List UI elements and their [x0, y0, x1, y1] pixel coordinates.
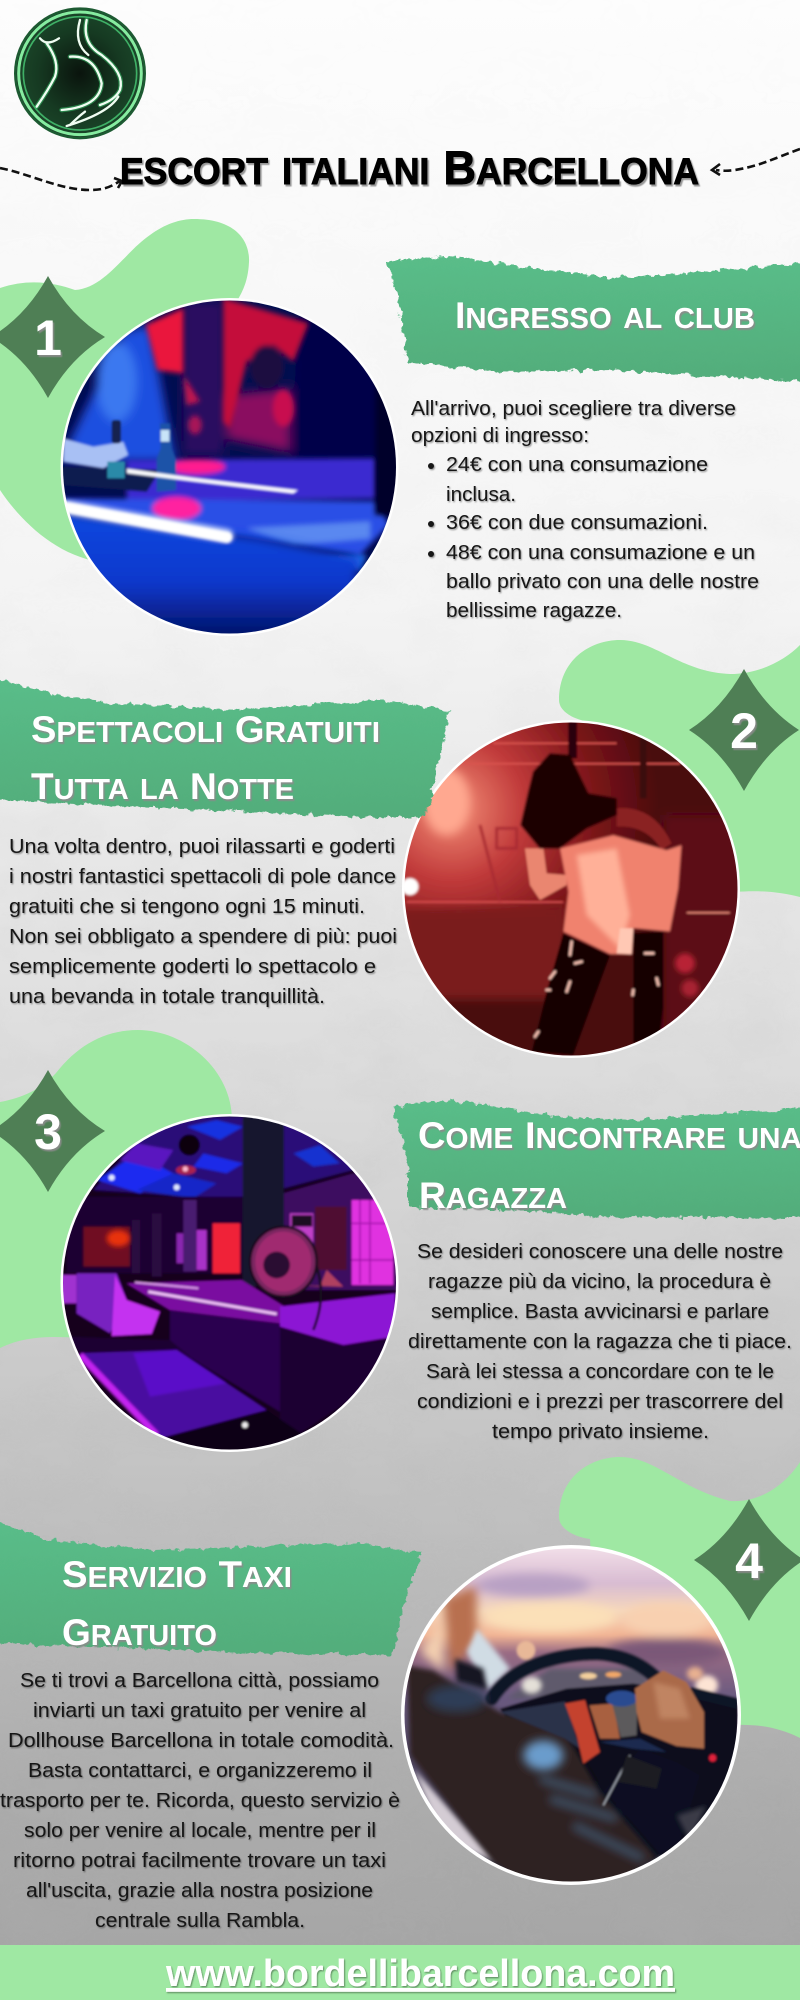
text block 1: 24€ con una consumazione	[446, 454, 708, 476]
heading 2	[31, 705, 380, 808]
star badge 2: 2	[730, 703, 758, 759]
text block 3: Se desideri conoscere una delle nostre	[417, 1241, 783, 1263]
blob 2	[559, 640, 800, 900]
text block 2: Non sei obbligato a spendere di più: puoi	[9, 926, 397, 948]
text block 3: tempo privato insieme.	[492, 1421, 709, 1443]
text block 1: inclusa.	[446, 484, 516, 506]
star badge 2	[689, 669, 799, 791]
photo 3: club interior in purple light	[60, 1110, 400, 1455]
text block 4: solo per venire al locale, mentre per il	[24, 1820, 376, 1842]
heading 3: Ragazza	[419, 1171, 567, 1217]
dashed arrow right	[712, 149, 800, 175]
blob 4	[559, 1457, 800, 1738]
text block 3: direttamente con la ragazza che ti piace.	[408, 1331, 792, 1353]
text block 1: 36€ con due consumazioni.	[446, 512, 708, 534]
text block 2: gratuiti che si tengono ogni 15 minuti.	[9, 896, 365, 918]
text block 1: ballo privato con una delle nostre	[446, 571, 759, 593]
text block 4: trasporto per te. Ricorda, questo servizio è	[0, 1790, 400, 1812]
banner 2	[0, 678, 449, 817]
text block 1: bellissime ragazze.	[446, 600, 622, 622]
text block 2: i nostri fantastici spettacoli di pole dance	[9, 866, 396, 888]
heading 3: Come Incontrare una	[418, 1111, 800, 1157]
text block 3: Sarà lei stessa a concordare con te le	[426, 1361, 774, 1383]
section 3	[0, 1070, 800, 1455]
text block 2: semplicemente goderti lo spettacolo e	[9, 956, 376, 978]
star badge 4: 4	[735, 1533, 763, 1589]
photo 2: pole dancer in red light	[400, 715, 745, 1060]
banner 1: Ingresso al club	[455, 291, 755, 337]
heading 2: Spettacoli Gratuiti	[31, 705, 380, 751]
logo	[15, 9, 145, 138]
text block 2	[9, 836, 397, 1008]
dashed arrow left	[0, 168, 122, 190]
heading 4: Gratuito	[62, 1608, 217, 1654]
banner 3	[393, 1100, 800, 1218]
text block 3: semplice. Basta avvicinarsi e parlare	[431, 1301, 769, 1323]
section 2	[0, 669, 799, 1060]
section 1	[0, 256, 800, 640]
text block 1: All'arrivo, puoi scegliere tra diverse	[411, 398, 736, 420]
photo 4: hand on steering wheel	[400, 1542, 745, 1887]
heading 4	[62, 1550, 292, 1654]
photo 1: club table in blue light	[60, 295, 400, 640]
text block 3: ragazze più da vicino, la procedura è	[428, 1271, 771, 1293]
star badge 3	[0, 1070, 105, 1192]
blob 1	[0, 219, 249, 562]
footer band	[0, 1945, 800, 2000]
text block 3: condizioni e i prezzi per trascorrere del	[417, 1391, 783, 1413]
text block 3	[408, 1241, 792, 1443]
banner 4	[0, 1521, 421, 1655]
star badge 1	[0, 276, 105, 398]
text block 4: ritorno potrai facilmente trovare un taxi	[13, 1850, 386, 1872]
text block 1: 48€ con una consumazione e un	[446, 542, 755, 564]
text block 4: Dollhouse Barcellona in totale comodità.	[8, 1730, 394, 1752]
star badge 1: 1	[34, 310, 62, 366]
text block 2: Una volta dentro, puoi rilassarti e goderti	[9, 836, 395, 858]
heading 4: Servizio Taxi	[62, 1550, 292, 1596]
star badge 4	[694, 1499, 800, 1621]
banner 1	[387, 256, 800, 381]
blob 3	[0, 1030, 232, 1348]
text block 4: Basta contattarci, e organizzeremo il	[28, 1760, 372, 1782]
text block 4	[0, 1670, 400, 1932]
text block 1	[411, 398, 759, 622]
text block 2: una bevanda in totale tranquillità.	[9, 986, 325, 1008]
heading 3	[418, 1111, 800, 1217]
text block 4: Se ti trovi a Barcellona città, possiamo	[20, 1670, 379, 1692]
footer url: www.bordellibarcellona.com	[165, 1953, 675, 1995]
text block 1: opzioni di ingresso:	[411, 425, 589, 447]
text block 4: centrale sulla Rambla.	[95, 1910, 305, 1932]
section 4	[0, 1499, 800, 1932]
text block 4: inviarti un taxi gratuito per venire al	[33, 1700, 366, 1722]
star badge 3: 3	[34, 1104, 62, 1160]
title: escort italiani Barcellona	[120, 137, 699, 196]
text block 4: all'uscita, grazie alla nostra posizione	[26, 1880, 373, 1902]
heading 2: Tutta la Notte	[31, 762, 294, 808]
